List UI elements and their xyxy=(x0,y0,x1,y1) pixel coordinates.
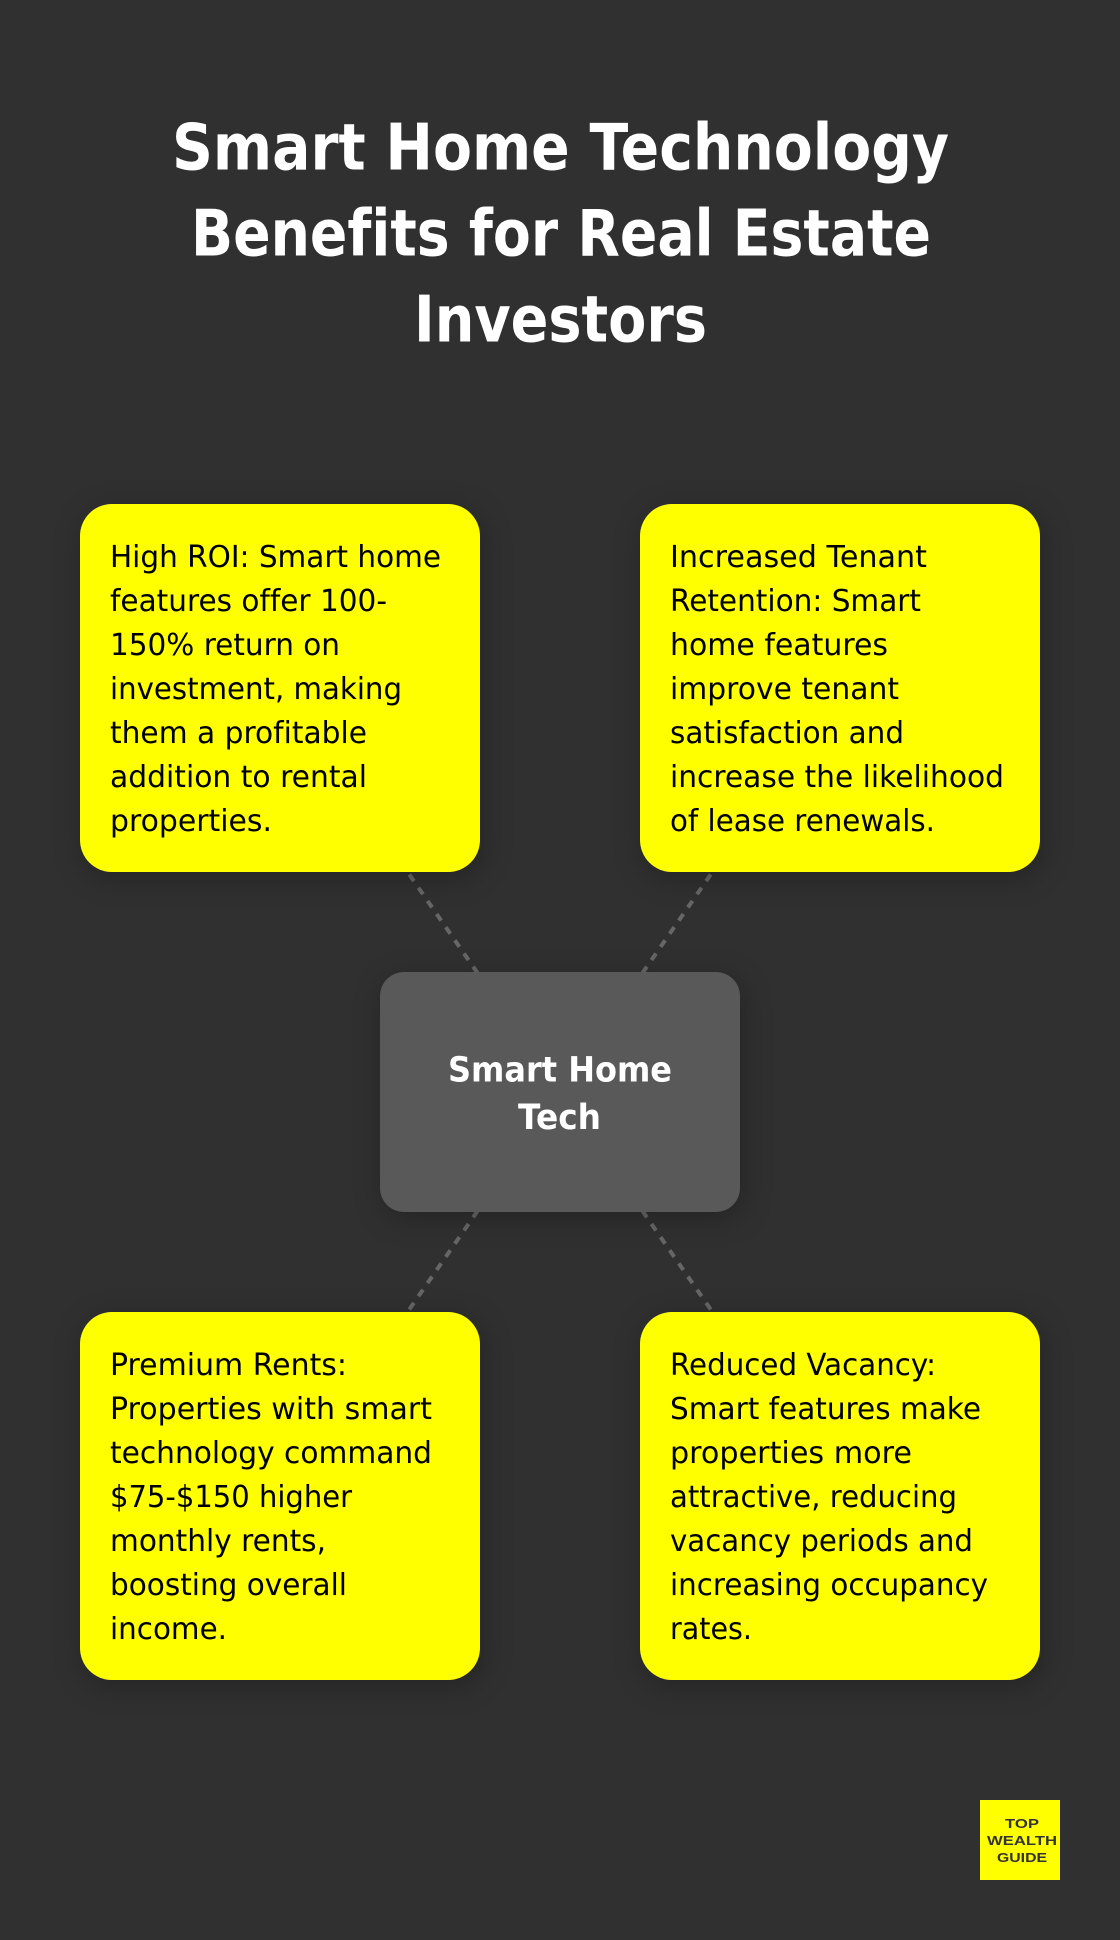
panel: reduced vacancy: increasing occupancy xyxy=(670,1568,988,1603)
panel: high ROI: addition to rental xyxy=(110,760,367,795)
panel: high ROI: them a profitable xyxy=(110,716,367,751)
connector: premium rents to center xyxy=(280,1092,560,1496)
title: Benefits for Real Estate xyxy=(191,198,931,272)
panel: premium rents: boosting overall xyxy=(110,1568,347,1603)
panel: premium rents: technology command xyxy=(110,1436,432,1471)
panel: high ROI: features offer 100- xyxy=(110,584,387,619)
panel: premium rents: Properties with smart xyxy=(110,1392,432,1427)
panel: high ROI: properties. xyxy=(110,804,272,839)
panel: increased tenant retention: of lease renewals. xyxy=(670,804,935,839)
panel: premium rents: Premium Rents: xyxy=(110,1348,347,1383)
panel: high ROI: investment, making xyxy=(110,672,402,707)
panel: high ROI: 150% return on xyxy=(110,628,340,663)
panel: increased tenant retention: increase the likelihood xyxy=(670,760,1004,795)
panel: increased tenant retention xyxy=(640,504,1040,872)
logo: TOP xyxy=(1005,1817,1039,1831)
panel: premium rents: $75-$150 higher xyxy=(110,1480,353,1515)
panel: increased tenant retention: satisfaction and xyxy=(670,716,904,751)
connector: reduced vacancy to center xyxy=(560,1092,840,1496)
panel: reduced vacancy xyxy=(640,1312,1040,1680)
title: Smart Home Technology xyxy=(172,112,949,186)
panel: reduced vacancy: properties more xyxy=(670,1436,912,1471)
connector: high ROI to center xyxy=(280,688,560,1092)
panel: premium rents: income. xyxy=(110,1612,227,1647)
center node: Smart Home xyxy=(448,1050,672,1090)
panel: reduced vacancy: rates. xyxy=(670,1612,752,1647)
panel: reduced vacancy: Smart features make xyxy=(670,1392,981,1427)
connector: tenant retention to center xyxy=(560,688,840,1092)
panel: increased tenant retention: Increased Tenant xyxy=(670,540,927,575)
panel: reduced vacancy: attractive, reducing xyxy=(670,1480,957,1515)
logo: WEALTH xyxy=(987,1834,1057,1848)
panel: increased tenant retention: Retention: Smart xyxy=(670,584,921,619)
title xyxy=(172,112,949,358)
panel: increased tenant retention: home features xyxy=(670,628,888,663)
logo xyxy=(980,1800,1060,1880)
center node: Tech xyxy=(518,1098,601,1138)
panel: premium rents: monthly rents, xyxy=(110,1524,326,1559)
center node xyxy=(380,972,740,1212)
panel: high ROI xyxy=(80,504,480,872)
logo: GUIDE xyxy=(997,1851,1047,1865)
panel: premium rents xyxy=(80,1312,480,1680)
title: Investors xyxy=(414,284,707,358)
panel: increased tenant retention: improve tenant xyxy=(670,672,899,707)
panel: high ROI: High ROI: Smart home xyxy=(110,540,441,575)
panel: reduced vacancy: vacancy periods and xyxy=(670,1524,973,1559)
panel: reduced vacancy: Reduced Vacancy: xyxy=(670,1348,936,1383)
